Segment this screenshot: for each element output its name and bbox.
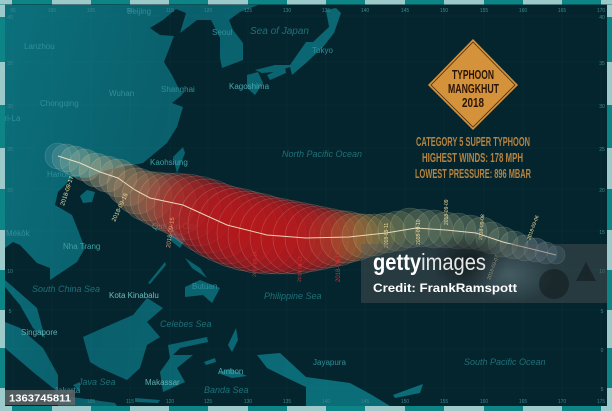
track date labels: 2018-09-08 — [478, 214, 486, 240]
landmasses — [5, 5, 423, 406]
getty logo: gettyimages — [373, 249, 486, 275]
grid coordinate labels: 115 — [126, 399, 134, 405]
grid coordinate labels: 25 — [599, 147, 605, 153]
warning diamond title sign — [428, 39, 518, 130]
city labels: Makassar — [145, 378, 180, 387]
grid coordinate labels: 125 — [204, 399, 212, 405]
grid coordinate labels: 150 — [440, 8, 448, 14]
city labels: Beijing — [127, 7, 151, 16]
city labels: Wuhan — [109, 89, 134, 98]
city labels: Kagoshima — [229, 82, 270, 91]
city labels: Nha Trang — [63, 242, 100, 251]
storm statistics: CATEGORY 5 SUPER TYPHOON — [416, 135, 530, 149]
image id badge — [5, 390, 75, 405]
city labels — [0, 7, 346, 395]
city labels: Kota Kinabalu — [109, 291, 159, 300]
sea labels: Celebes Sea — [160, 319, 212, 329]
track date labels: 2018-09-09 — [444, 199, 450, 225]
grid coordinate labels: 15 — [599, 230, 605, 236]
sea labels: Philippine Sea — [264, 291, 322, 301]
warning diamond title sign: 2018 — [462, 95, 484, 110]
city labels: Singapore — [21, 328, 58, 337]
grid coordinate labels: 165 — [558, 8, 566, 14]
credit text: Credit: FrankRamspott — [373, 281, 517, 295]
grid coordinate labels: 35 — [7, 61, 13, 67]
city labels: Hanoi — [47, 170, 68, 179]
grid coordinate labels: 130 — [244, 399, 252, 405]
city labels: Ambon — [218, 367, 243, 376]
city labels: Mékôk — [6, 229, 31, 238]
city labels: Quezon City — [152, 222, 196, 231]
grid coordinate labels: 10 — [599, 269, 605, 275]
track date labels: 2018-09-10 — [416, 219, 422, 245]
grid coordinate labels: 145 — [401, 8, 409, 14]
grid coordinate labels: 105 — [87, 399, 95, 405]
track date labels: 2018-09-11 — [384, 223, 390, 248]
city labels: Tokyo — [312, 46, 333, 55]
sea labels: Banda Sea — [204, 385, 249, 395]
grid coordinate labels: 5 — [601, 309, 604, 315]
city labels: gri-La — [0, 114, 21, 123]
grid coordinate labels: 140 — [322, 399, 330, 405]
grid coordinate labels: 10 — [7, 269, 13, 275]
typhoon track line — [58, 156, 556, 255]
grid coordinate labels: 30 — [599, 104, 605, 110]
grid coordinate labels: 155 — [440, 399, 448, 405]
image id badge: 1363745811 — [9, 392, 71, 404]
grid coordinate labels: 160 — [519, 8, 527, 14]
grid coordinate labels: 115 — [166, 8, 174, 14]
grid coordinate labels: 110 — [126, 8, 134, 14]
city labels: Seoul — [212, 28, 233, 37]
storm statistics: LOWEST PRESSURE: 896 MBAR — [415, 167, 531, 181]
warning diamond title sign: TYPHOON — [452, 67, 494, 82]
grid coordinate labels: 25 — [7, 147, 13, 153]
grid coordinate labels: 120 — [204, 8, 212, 14]
grid coordinate labels: 140 — [361, 8, 369, 14]
grid coordinate labels: 160 — [480, 399, 488, 405]
storm statistics — [415, 135, 531, 181]
city labels: Jakarta — [54, 386, 81, 395]
grid coordinate labels: 135 — [322, 8, 330, 14]
sea labels — [32, 26, 546, 395]
grid coordinate labels: 5 — [9, 309, 12, 315]
grid coordinate labels: 120 — [166, 399, 174, 405]
track date labels: 2018-09-15 — [166, 216, 176, 248]
grid coordinate labels: 170 — [558, 399, 566, 405]
grid coordinate labels: 175 — [597, 399, 605, 405]
grid coordinate labels: 165 — [519, 399, 527, 405]
track date labels: 2018-09-14 — [252, 251, 259, 277]
grid coordinate labels: 40 — [7, 15, 13, 21]
sea labels: South China Sea — [32, 284, 100, 294]
city labels: Chongqing — [40, 99, 79, 108]
watermark band — [361, 232, 612, 303]
city labels: Jayapura — [313, 358, 346, 367]
sea labels: North Pacific Ocean — [282, 149, 362, 159]
grid coordinate labels: 135 — [283, 399, 291, 405]
track date labels: 2018-09-06 — [526, 214, 541, 241]
grid coordinate labels: 20 — [599, 188, 605, 194]
grid coordinate labels: 30 — [7, 104, 13, 110]
grid coordinate labels: 40 — [599, 15, 605, 21]
storm statistics: HIGHEST WINDS: 178 MPH — [422, 151, 523, 165]
city labels: Kaohsiung — [150, 158, 188, 167]
grid coordinate labels: 100 — [48, 8, 56, 14]
city labels: Lanzhou — [24, 42, 55, 51]
track date labels: 2018-09-17 — [60, 175, 76, 207]
typhoon wind circles — [45, 143, 565, 274]
city labels: Shanghai — [161, 85, 195, 94]
grid coordinate labels: 20 — [7, 188, 13, 194]
grid coordinate labels: 145 — [361, 399, 369, 405]
warning diamond title sign: MANGKHUT — [448, 81, 499, 96]
sea labels: South Pacific Ocean — [464, 357, 546, 367]
grid coordinate labels: 150 — [401, 399, 409, 405]
track date labels — [60, 175, 541, 282]
grid coordinate labels: 35 — [599, 61, 605, 67]
grid coordinate labels: 170 — [597, 8, 605, 14]
sea labels: Java Sea — [77, 377, 116, 387]
grid coordinate labels: 0 — [601, 348, 604, 354]
track date labels: 2018-09-07 — [486, 254, 501, 281]
city labels: Butuan — [192, 282, 217, 291]
track date labels: 2018-09-16 — [111, 192, 130, 223]
grid coordinate labels: 155 — [480, 8, 488, 14]
sea labels: Sea of Japan — [250, 26, 309, 37]
grid coordinate labels: 125 — [244, 8, 252, 14]
grid coordinate labels: 5 — [601, 387, 604, 393]
grid coordinate labels: 105 — [87, 8, 95, 14]
grid coordinate labels: 95 — [10, 8, 16, 14]
track date labels: 2018-09-13 — [297, 256, 304, 282]
track date labels: 2018-09-12 — [336, 251, 342, 282]
grid coordinate labels: 130 — [283, 8, 291, 14]
